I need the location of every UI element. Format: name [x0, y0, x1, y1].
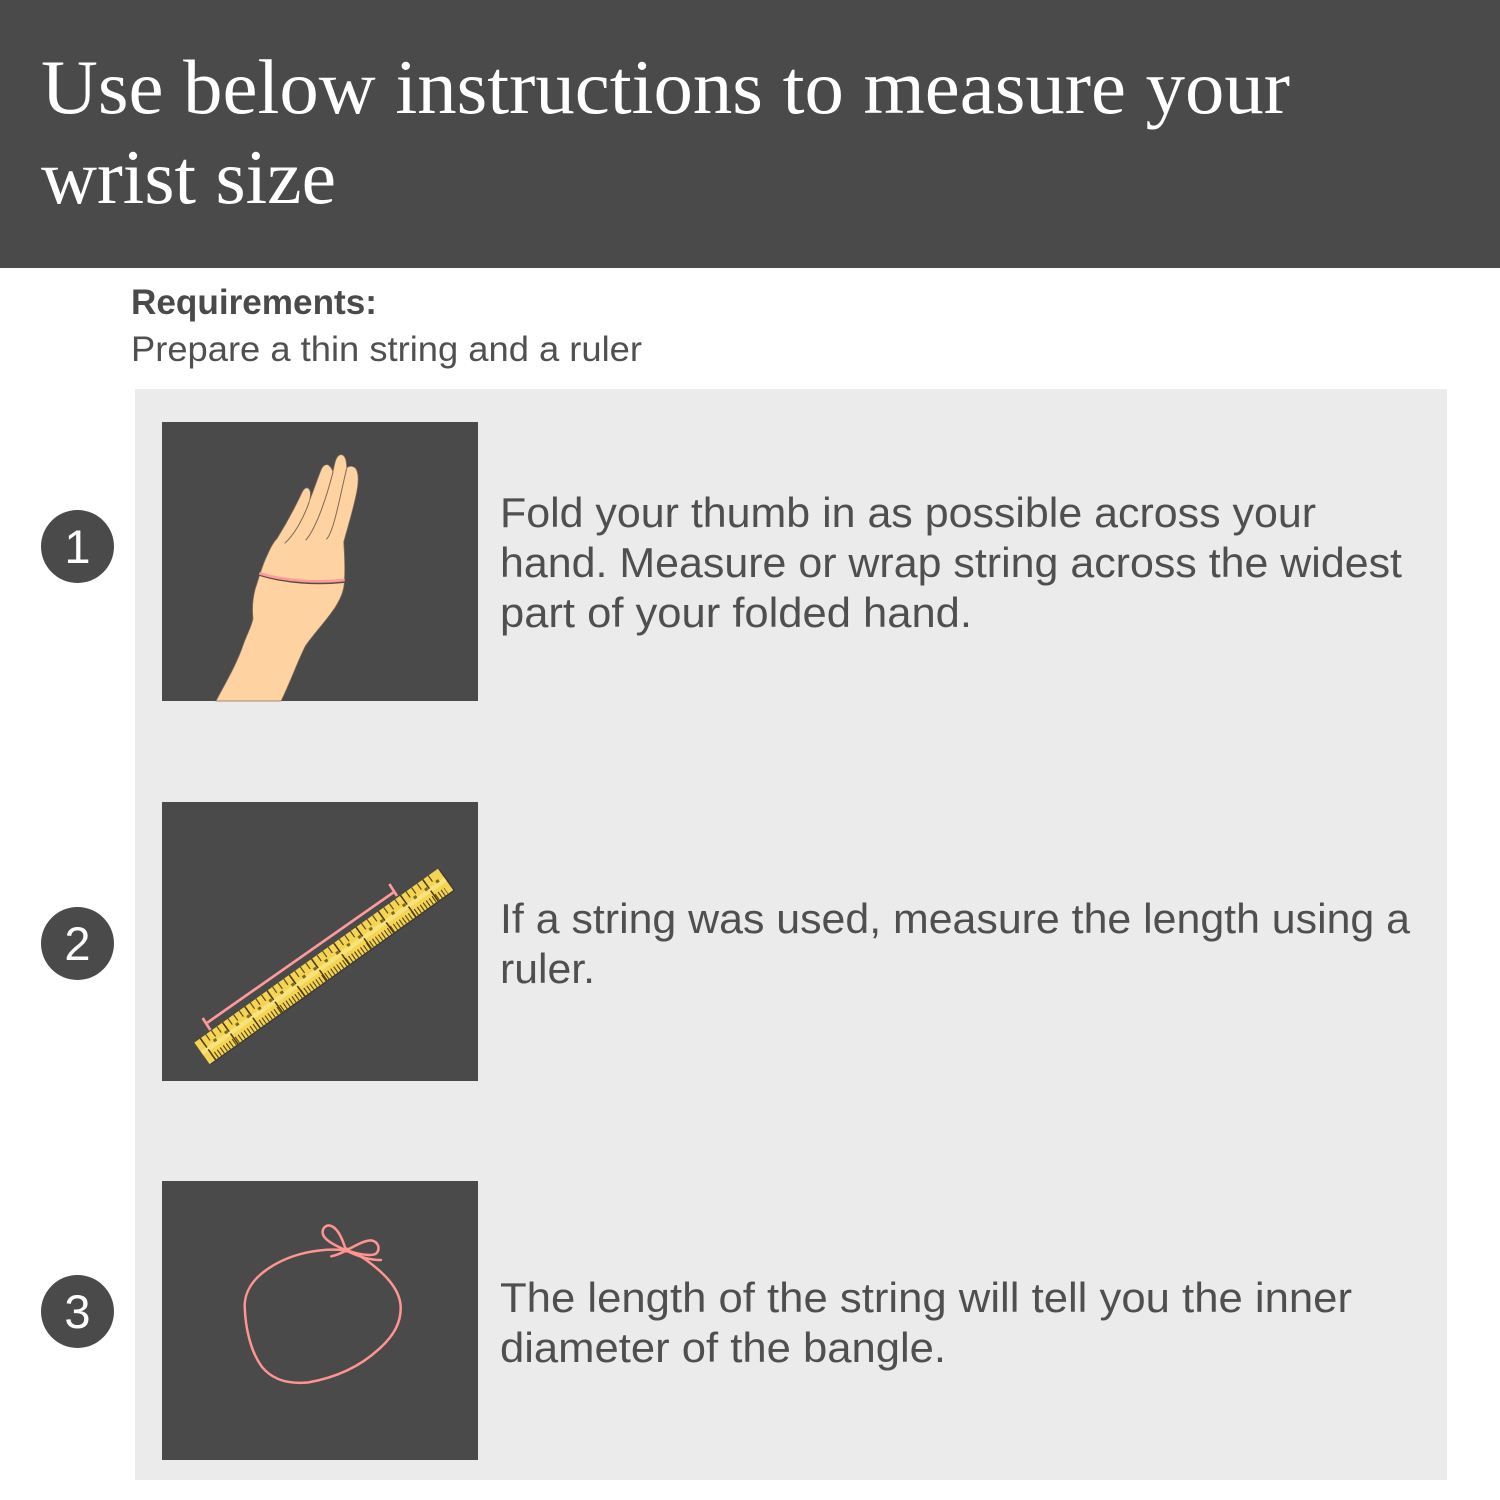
bow — [323, 1225, 381, 1260]
step 1 number badge — [41, 510, 114, 583]
panel: steps background — [135, 389, 1447, 1480]
title: Use below instructions to measure your — [41, 44, 1290, 130]
string around hand — [259, 573, 345, 583]
step 3 text: The length of the string will tell you the inner — [500, 1274, 1352, 1321]
requirements text: Prepare a thin string and a ruler — [131, 330, 642, 369]
string length marker — [203, 884, 397, 1030]
icon: hand — [216, 455, 358, 701]
step 1 text — [500, 489, 1402, 636]
step 2 illustration: ruler and string — [162, 802, 478, 1081]
step 3 number badge — [41, 1275, 114, 1348]
step 2 text — [500, 895, 1411, 992]
step 3 text — [500, 1274, 1352, 1371]
step 2 text: ruler. — [500, 945, 595, 992]
step 1 text: hand. Measure or wrap string across the widest — [500, 539, 1402, 586]
string loop — [245, 1250, 401, 1383]
ruler — [194, 868, 455, 1065]
step 2 number badge: 2 — [64, 917, 91, 970]
step 1 number badge: 1 — [64, 520, 91, 573]
finger lines — [285, 469, 347, 543]
step 3 illustration: tied string loop — [162, 1181, 478, 1460]
requirements text — [131, 283, 642, 369]
step 3 number badge: 3 — [64, 1285, 91, 1338]
step 1 text: part of your folded hand. — [500, 589, 972, 636]
step 2 number badge — [41, 907, 114, 980]
title: wrist size — [41, 134, 336, 220]
title — [41, 44, 1290, 220]
step 1 illustration: hand with string — [162, 422, 478, 701]
requirements text: Requirements: — [131, 283, 377, 322]
step 3 text: diameter of the bangle. — [500, 1324, 946, 1371]
step 1 text: Fold your thumb in as possible across your — [500, 489, 1316, 536]
step 2 text: If a string was used, measure the length using a — [500, 895, 1411, 942]
header banner — [0, 0, 1500, 268]
